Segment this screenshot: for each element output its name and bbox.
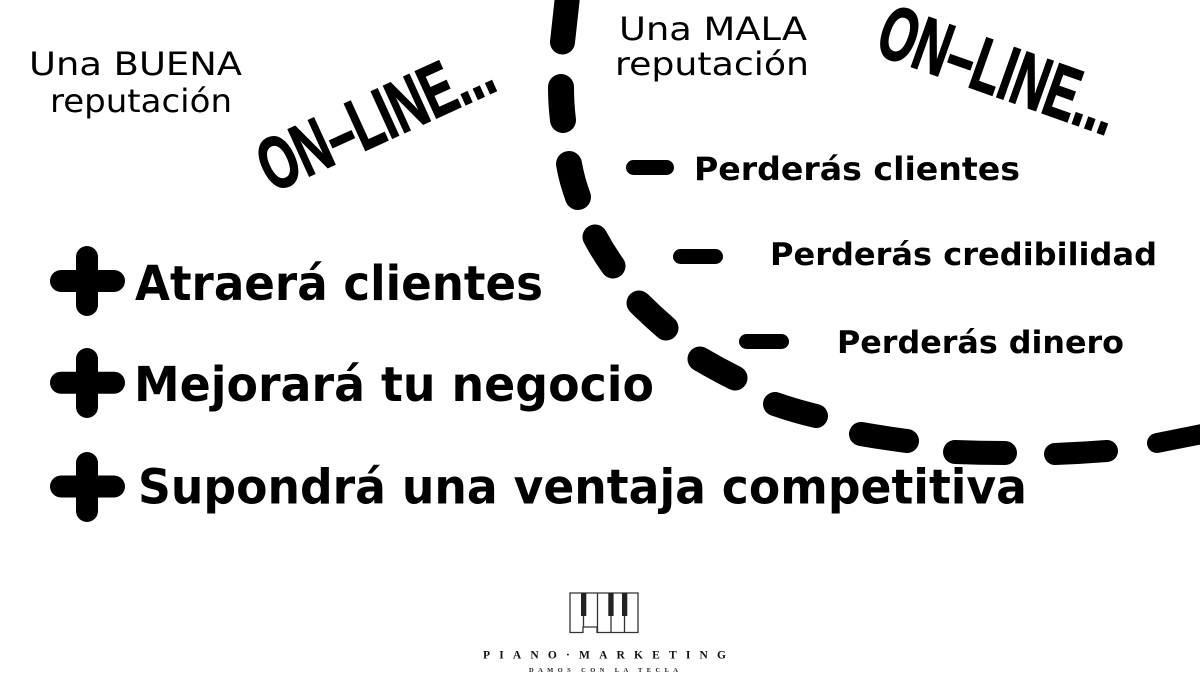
- logo: piano marketing: [483, 593, 726, 674]
- item: lose clients: Perderás clientes: [694, 150, 1020, 188]
- icon: piano keys: [570, 593, 638, 632]
- heading: bad reputation: Una MALA: [619, 10, 807, 48]
- item: competitive advantage: Supondrá una ventaja competitiva: [138, 460, 1027, 516]
- dashed dividing curve: [561, 0, 1200, 454]
- logo: piano marketing: DAMOS CON LA TECLA: [529, 667, 678, 674]
- heading: good reputation: [29, 45, 242, 120]
- item: improve business: Mejorará tu negocio: [134, 357, 654, 413]
- heading: bad reputation: reputación: [615, 45, 809, 83]
- item: lose money: Perderás dinero: [837, 325, 1124, 361]
- item: attract clients: Atraerá clientes: [135, 256, 543, 312]
- logo: piano marketing: PIANO·MARKETING: [483, 650, 726, 662]
- list: negative consequences: [634, 150, 1157, 361]
- heading: good reputation: reputación: [50, 82, 232, 120]
- list: positive consequences: [61, 256, 1027, 516]
- heading: good reputation: Una BUENA: [29, 45, 242, 83]
- heading: bad reputation: [615, 10, 809, 83]
- item: lose credibility: Perderás credibilidad: [770, 237, 1157, 273]
